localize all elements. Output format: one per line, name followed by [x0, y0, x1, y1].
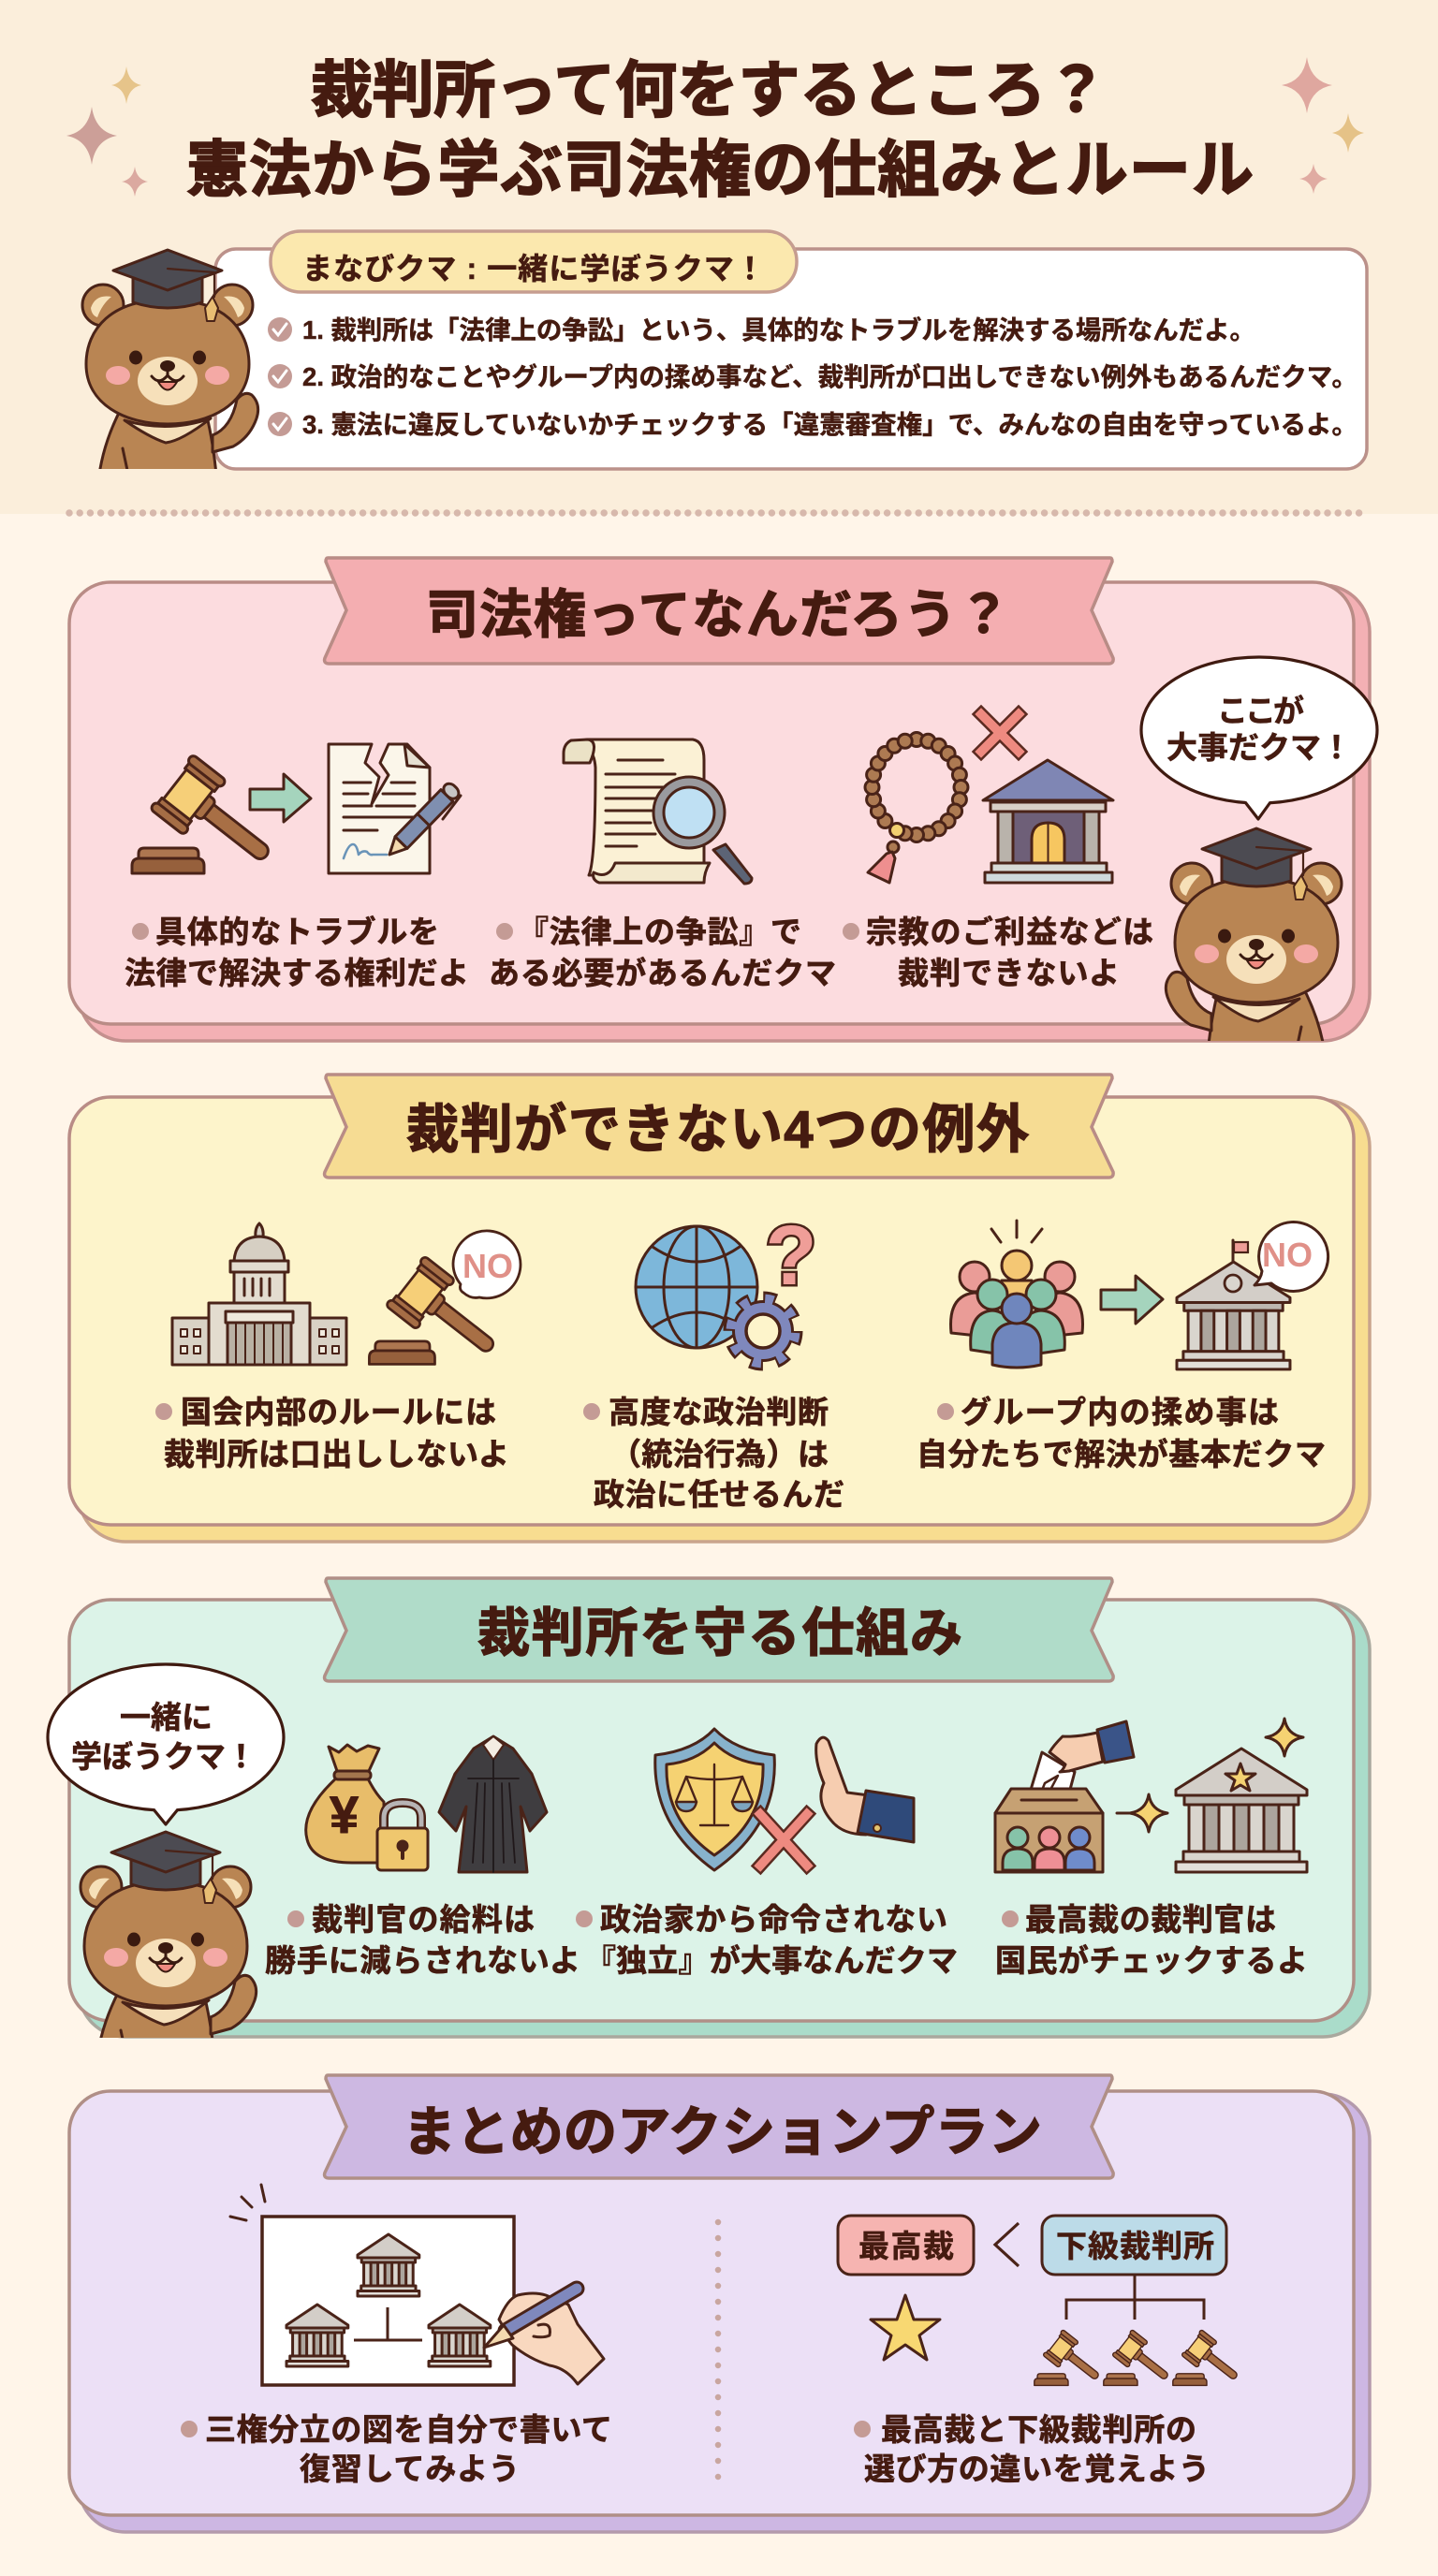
icon: arrow	[250, 774, 311, 822]
icon: money bag and lock: ¥	[330, 1785, 359, 1844]
icon: red cross	[981, 714, 1019, 752]
label box: 下級裁判所	[1042, 2216, 1226, 2275]
caption 1: 具体的なトラブルを	[155, 915, 439, 949]
icon: money bag and lock	[306, 1745, 428, 1870]
icon: court with NO: NO	[1262, 1236, 1313, 1274]
label box: 下級裁判所: 下級裁判所	[1056, 2229, 1214, 2263]
heading banner	[325, 1075, 1113, 1178]
caption 3	[843, 915, 1153, 990]
bear mascot: header	[82, 250, 258, 475]
bear mascot: panel 3	[81, 1832, 257, 2056]
caption 3: 宗教のご利益などは	[866, 915, 1153, 949]
caption 2: （統治行為）は	[610, 1437, 829, 1471]
heading banner	[325, 558, 1113, 664]
caption 3: 国民がチェックするよ	[995, 1943, 1308, 1978]
caption 1	[155, 1395, 509, 1471]
panel: 裁判所を守る仕組み	[48, 1578, 1370, 2056]
caption 2	[854, 2412, 1210, 2486]
caption 3	[917, 1395, 1326, 1471]
caption 1: 三権分立の図を自分で書いて	[205, 2412, 612, 2447]
caption 1	[265, 1902, 580, 1978]
tree diagram with gavels	[1034, 2275, 1246, 2390]
caption 1: 勝手に減らされないよ	[265, 1943, 580, 1978]
caption 1: 裁判所は口出ししないよ	[164, 1437, 509, 1471]
icon: court with NO	[1177, 1222, 1328, 1369]
icon: arrow	[1101, 1276, 1163, 1324]
caption 3: 自分たちで解決が基本だクマ	[917, 1437, 1326, 1471]
callout: NO: NO	[462, 1247, 513, 1285]
icon: three branches sketch	[230, 2185, 604, 2385]
panel: 裁判ができない4つの例外	[69, 1075, 1370, 1542]
speech bubble: ここが大事だクマ！	[1141, 657, 1377, 819]
sparkles: left	[66, 66, 148, 197]
caption 3	[995, 1902, 1308, 1978]
caption 1: 裁判官の給料は	[312, 1902, 535, 1937]
caption 3: 裁判できないよ	[898, 956, 1120, 990]
caption 1	[181, 2412, 612, 2486]
icon: shield with scales	[655, 1729, 914, 1870]
caption 1: 国会内部のルールには	[181, 1395, 496, 1429]
heading banner	[325, 1578, 1113, 1681]
icon: stop hand	[816, 1737, 914, 1842]
bear mascot: panel 1	[1166, 828, 1342, 1053]
divider	[715, 2222, 721, 2479]
icon: gear	[731, 1299, 795, 1363]
caption 3: 最高裁の裁判官は	[1025, 1902, 1276, 1937]
icon: ballot box	[995, 1721, 1167, 1872]
caption 1: 法律で解決する権利だよ	[125, 956, 469, 990]
icon: judge robe	[439, 1736, 547, 1872]
caption 1: 復習してみよう	[300, 2452, 520, 2486]
heading banner: 裁判所を守る仕組み	[477, 1603, 962, 1662]
heading banner	[325, 2075, 1113, 2178]
icon: globe and gear	[636, 1209, 816, 1363]
icon: sparkle	[1130, 1794, 1167, 1832]
icon: prayer beads, cross and temple	[865, 714, 1113, 883]
caption 2	[576, 1902, 958, 1978]
icon: court with star	[1176, 1719, 1307, 1872]
speech bubble: ここが大事だクマ！: ここが	[1217, 694, 1304, 728]
icon: group of people	[951, 1221, 1082, 1368]
icon: torn document	[329, 744, 430, 873]
speech bubble: 一緒に学ぼうクマ！	[48, 1664, 284, 1824]
caption 2: ある必要があるんだクマ	[489, 956, 836, 990]
icon: red cross	[760, 1814, 807, 1866]
icon: globe and gear: ?	[766, 1209, 816, 1303]
caption 2: 高度な政治判断	[609, 1395, 829, 1429]
heading banner: まとめのアクションプラン	[403, 2102, 1042, 2162]
comparison symbol	[995, 2223, 1019, 2266]
header band	[0, 0, 1438, 514]
speech bubble: 一緒に学ぼうクマ！: 一緒に	[120, 1700, 213, 1734]
heading banner: 司法権ってなんだろう？	[426, 585, 1010, 644]
caption 2: 政治家から命令されない	[600, 1902, 947, 1937]
speech bubble: ここが大事だクマ！: 大事だクマ！	[1167, 730, 1352, 765]
caption 3: グループ内の揉め事は	[961, 1395, 1279, 1429]
icon: gavel to torn contract	[132, 744, 462, 883]
panel: まとめのアクションプラン	[69, 2075, 1370, 2532]
sparkles: right	[1282, 57, 1364, 194]
caption 2: 『独立』が大事なんだクマ	[585, 1943, 958, 1978]
speech bubble: 一緒に学ぼうクマ！: 学ぼうクマ！	[71, 1739, 257, 1774]
icon: hand with pen	[484, 2289, 604, 2384]
caption 2	[583, 1395, 844, 1512]
label box: 最高裁: 最高裁	[858, 2229, 954, 2263]
caption 2: 最高裁と下級裁判所の	[881, 2412, 1196, 2447]
caption 2: 『法律上の争訟』で	[518, 915, 801, 949]
name pill	[271, 231, 797, 292]
heading banner: 裁判ができない4つの例外	[406, 1100, 1029, 1159]
caption 1	[125, 915, 469, 990]
label box: 最高裁	[838, 2216, 974, 2275]
caption 2: 政治に任せるんだ	[594, 1477, 844, 1512]
icon: national diet building	[172, 1223, 346, 1365]
icon: star	[871, 2295, 940, 2360]
intro card	[215, 231, 1367, 469]
key point 1: 1. 裁判所は「法律上の争訟」という、具体的なトラブルを解決する場所なんだよ。	[302, 315, 1255, 344]
caption 2: 選び方の違いを覚えよう	[864, 2452, 1210, 2486]
icon: pen	[384, 781, 462, 860]
icon: scroll with magnifier	[564, 739, 752, 884]
key point 3: 3. 憲法に違反していないかチェックする「違憲審査権」で、みんなの自由を守っているよ。	[302, 410, 1357, 439]
icon: gavel	[369, 1256, 511, 1373]
name pill: まなびクマ : 一緒に学ぼうクマ！	[302, 252, 765, 285]
icon: temple	[983, 760, 1113, 883]
panel: 司法権ってなんだろう？	[69, 558, 1377, 1053]
caption 2	[489, 915, 836, 990]
callout: NO	[453, 1231, 521, 1298]
title	[186, 55, 1254, 204]
title: 裁判所って何をするところ？	[311, 55, 1108, 124]
title: 憲法から学ぶ司法権の仕組みとルール	[186, 135, 1254, 204]
key point 2: 2. 政治的なことやグループ内の揉め事など、裁判所が口出しできない例外もあるんだクマ。	[302, 362, 1357, 391]
